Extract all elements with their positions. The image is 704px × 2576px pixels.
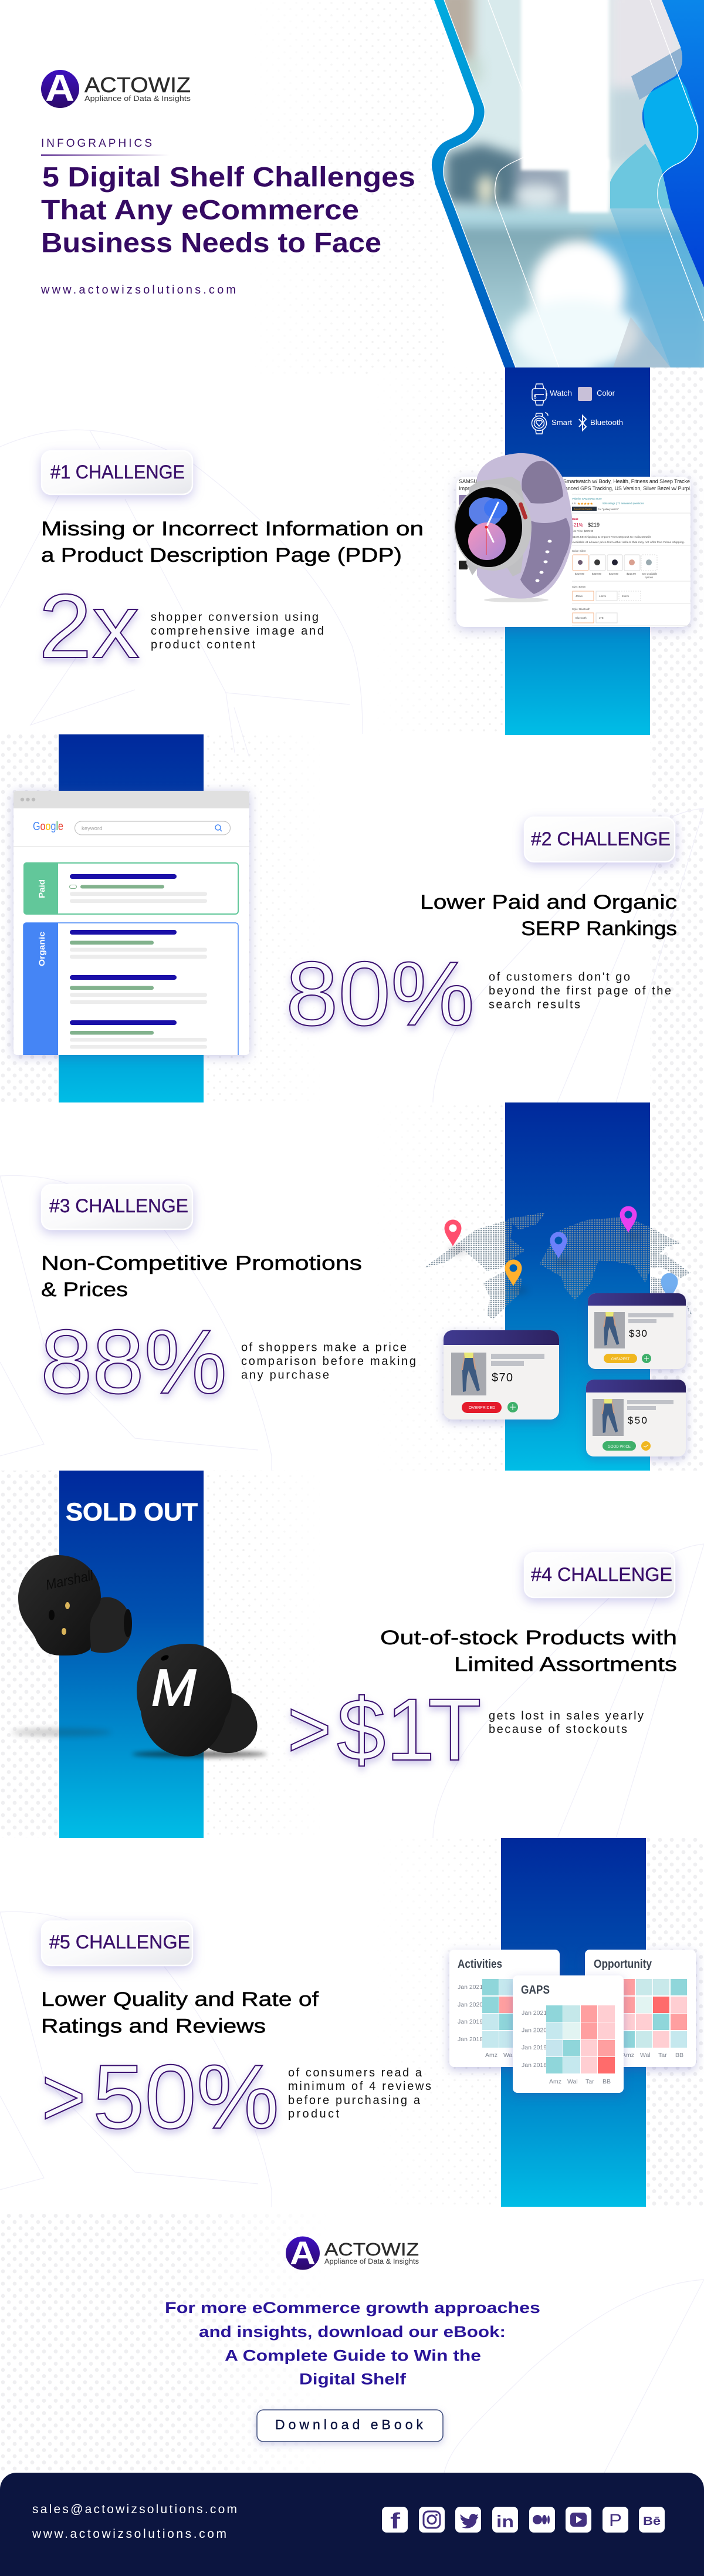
stat description: minimum of 4 reviews (288, 2080, 431, 2093)
feature icons: watch, color, smart, bluetooth: Watch (550, 389, 572, 397)
badge: #1 challenge: #1 CHALLENGE (50, 461, 185, 483)
feature icons: watch, color, smart, bluetooth (532, 384, 623, 434)
product page card: 526 ratings | 72 answered questions (603, 502, 644, 505)
gaps heat map card: Jan 2018 (522, 2062, 547, 2069)
badge: #2 challenge (524, 817, 675, 862)
download button: Download eBook (275, 2417, 424, 2432)
organic results: Organic (38, 931, 46, 966)
heading: Missing or Incorrect Information on (41, 518, 424, 540)
activities heat map card: Jan 2018 (458, 2036, 483, 2043)
badge: #4 challenge: #4 CHALLENGE (531, 1564, 672, 1585)
stat description: product content (151, 639, 255, 652)
heading: a Product Description Page (PDP) (41, 544, 402, 567)
opportunity heat map card: BB (675, 2052, 683, 2059)
product card: $70 overpriced: $70 (492, 1371, 513, 1384)
call to action text: For more eCommerce growth approaches (165, 2299, 540, 2317)
product page card: $219 (588, 522, 600, 528)
activities heat map card: Jan 2020 (458, 2001, 483, 2008)
social icons (382, 2507, 665, 2534)
call to action text: Digital Shelf (299, 2371, 407, 2388)
opportunity heat map card: Wal (640, 2052, 651, 2059)
product page card: Deal (572, 518, 578, 521)
eyebrow: infographics (41, 137, 170, 156)
stat: >50%: 50% (93, 2046, 279, 2147)
stat description (241, 1341, 416, 1382)
panel: challenge 4 (12, 1471, 677, 1838)
paid result (23, 862, 238, 915)
call to action text (165, 2299, 540, 2388)
product page card: Amazon's Choice (574, 507, 593, 511)
product page card: Available at a lower price from other sellers that may not offer free Prime shipping. (572, 541, 685, 544)
stat: 80%: 80% (286, 943, 475, 1044)
smartwatch (454, 453, 573, 602)
logo: Actowiz (41, 67, 191, 109)
product page card: for "galaxy watch" (598, 508, 619, 511)
activities heat map card: Jan 2021 (458, 1984, 483, 1991)
pin: yellow (505, 1260, 522, 1286)
badge: #5 challenge (42, 1921, 192, 1965)
download button (257, 2410, 443, 2442)
stat: 2x: 2x (39, 575, 140, 677)
stat description: product (288, 2108, 339, 2120)
product page card: Smartwatch w/ Body, Health, Fitness and Sleep Tracke (563, 478, 690, 484)
badge: #3 challenge: #3 CHALLENGE (49, 1195, 188, 1216)
gaps heat map card: Wal (567, 2078, 578, 2085)
panel: challenge 5 (41, 1838, 696, 2207)
stat description: of customers don't go (489, 971, 630, 984)
gaps heat map card: GAPS (521, 1984, 550, 1997)
gaps heat map card: Jan 2020 (522, 2027, 547, 2034)
stat: >$1T: $1T (337, 1680, 482, 1779)
product page card: Style: Bluetooth (572, 608, 590, 611)
logo: Actowiz closing: Appliance of Data & Insights (324, 2258, 419, 2265)
product card: $50 good price: GOOD PRICE (608, 1445, 631, 1449)
pin: red (445, 1220, 461, 1246)
social icons: f (390, 2509, 400, 2534)
logo: Actowiz closing (286, 2234, 419, 2271)
feature icons: watch, color, smart, bluetooth: 5 (534, 395, 537, 400)
stat description: search results (489, 998, 580, 1011)
website url: www.actowizsolutions.com (40, 284, 236, 296)
product page card: LTE (599, 616, 604, 619)
product page card: 44mm (599, 595, 607, 598)
product page card: Color: Silver (572, 549, 586, 552)
heading (420, 891, 677, 940)
stat description: of shoppers make a price (241, 1341, 407, 1354)
heading (41, 1988, 319, 2037)
feature icons: watch, color, smart, bluetooth: Color (597, 389, 615, 397)
title: That Any eCommerce (41, 194, 359, 225)
panel: challenge 3 (40, 1102, 698, 1471)
title: 5 Digital Shelf Challenges (42, 161, 415, 193)
gaps heat map card (513, 1975, 624, 2093)
product card: $30 cheapest: CHEAPEST (611, 1358, 629, 1361)
gaps heat map card: Jan 2021 (522, 2009, 547, 2017)
heading: Out-of-stock Products with (380, 1627, 677, 1649)
logo: Actowiz closing: A (290, 2234, 316, 2271)
activities heat map card: Activities (458, 1958, 502, 1971)
social icons: in (496, 2513, 514, 2531)
stat description: comprehensive image and (151, 625, 324, 638)
product card: $50 good price: $50 (628, 1415, 647, 1426)
stat description: of consumers read a (288, 2066, 422, 2079)
opportunity heat map card (585, 1950, 696, 2067)
stat: 88%: 88% (40, 1311, 227, 1412)
product page card: $219.99 (609, 572, 618, 575)
badge: #4 challenge (524, 1553, 675, 1597)
logo: Actowiz closing: ACTOWIZ (324, 2239, 419, 2260)
left earbud (18, 1555, 132, 1655)
product page card (456, 477, 691, 627)
badge: #5 challenge: #5 CHALLENGE (49, 1931, 190, 1953)
stat description: beyond the first page of the (489, 984, 671, 997)
logo: Actowiz: ACTOWIZ (84, 73, 191, 97)
product page card: $329.99 (592, 572, 601, 575)
product page card: $219.99 (627, 572, 636, 575)
product card: $50 good price (586, 1380, 686, 1456)
product card: $70 overpriced (444, 1330, 559, 1420)
panel: challenge 2 (13, 734, 677, 1102)
activities heat map card (449, 1950, 560, 2067)
right earbud: M (151, 1658, 197, 1717)
feature icons: watch, color, smart, bluetooth: Bluetooth (590, 418, 623, 427)
logo: Actowiz: A (45, 67, 75, 109)
product page card: $109.58 Shipping & Import Fees Deposit to India Details (572, 535, 652, 538)
title: Business Needs to Face (41, 227, 381, 258)
pin: light blue (661, 1273, 678, 1300)
search results browser mock: keyword (82, 825, 102, 832)
opportunity heat map card: Amz (622, 2052, 634, 2059)
pin: magenta (620, 1206, 637, 1233)
stat: >$1T: > (287, 1683, 331, 1775)
blue column (501, 1838, 646, 2207)
world map with pins (422, 1206, 698, 1324)
product page card: ★★★★★ (577, 502, 593, 506)
blue column (505, 367, 650, 735)
product page card: Bluetooth (576, 616, 587, 619)
product page card: anced GPS Tracking, US Version, Silver Bezel w/ Purpl (565, 485, 690, 491)
product card: $30 cheapest (588, 1293, 686, 1369)
search results browser mock (13, 791, 249, 1055)
product page card: options (645, 576, 654, 579)
heading: Ratings and Reviews (41, 2015, 266, 2037)
heading: Non-Competitive Promotions (41, 1252, 362, 1274)
heading: Limited Assortments (454, 1653, 677, 1675)
blue column (505, 1102, 650, 1471)
activities heat map card: Amz (485, 2052, 497, 2059)
contact website: www.actowizsolutions.com (32, 2527, 226, 2541)
stat description: because of stockouts (489, 1723, 627, 1736)
call to action text: and insights, download our eBook: (199, 2323, 506, 2341)
feature icons: watch, color, smart, bluetooth: Smart (551, 418, 572, 427)
blue column (59, 1471, 204, 1838)
header image: blurred photo in angled frame (432, 0, 704, 377)
search results browser mock: Google (33, 820, 63, 833)
badge: #3 challenge (42, 1185, 192, 1229)
organic results (23, 923, 238, 1055)
stat: >50%: > (42, 2051, 86, 2143)
stat description: comparison before making (241, 1355, 416, 1368)
heading: Lower Paid and Organic (420, 891, 677, 913)
product page card: Visit the SAMSUNG Store (572, 497, 602, 500)
product page card: $219.99 (575, 572, 584, 575)
blue column (59, 734, 204, 1102)
call to action text: A Complete Guide to Win the (225, 2347, 481, 2365)
product page card: See available (642, 572, 658, 575)
heading: SERP Rankings (521, 918, 677, 940)
product page card: 45mm (622, 595, 629, 598)
product page card: 4.6 (572, 502, 576, 505)
badge: #2 challenge: #2 CHALLENGE (531, 828, 671, 849)
badge: #1 challenge (42, 451, 192, 494)
paid result: Paid (38, 879, 46, 898)
pin: violet (550, 1232, 567, 1259)
stat description (489, 971, 671, 1011)
product page card: 40mm (576, 595, 583, 598)
stat description (288, 2066, 431, 2120)
product page card: List Price: $279.99 (572, 530, 594, 532)
product card: $70 overpriced: OVERPRICED (469, 1406, 495, 1410)
eyebrow: infographics: INFOGRAPHICS (41, 137, 152, 150)
gaps heat map card: Amz (549, 2078, 561, 2085)
product page card: Size: 40mm (572, 585, 586, 588)
contact email: sales@actowizsolutions.com (32, 2503, 237, 2516)
right earbud (137, 1644, 258, 1756)
social icons: P (609, 2511, 622, 2530)
social icons: Bē (643, 2515, 661, 2528)
product card: $30 cheapest: $30 (629, 1328, 647, 1339)
gaps heat map card: Tar (585, 2078, 594, 2085)
heading (41, 1252, 362, 1301)
stat description: shopper conversion using (151, 611, 319, 623)
heading: Lower Quality and Rate of (41, 1988, 319, 2011)
activities heat map card: Wal (503, 2052, 514, 2059)
footer (0, 2473, 704, 2576)
stat description: gets lost in sales yearly (489, 1710, 644, 1722)
heading (380, 1627, 677, 1675)
product page card: SAMSU (459, 478, 478, 484)
stat description (151, 611, 324, 652)
title (41, 161, 415, 258)
sold out label: SOLD OUT (66, 1498, 198, 1526)
stat description: any purchase (241, 1369, 329, 1382)
stat description: before purchasing a (288, 2094, 421, 2107)
opportunity heat map card: Opportunity (594, 1958, 652, 1971)
left earbud: Marshall (45, 1567, 95, 1593)
opportunity heat map card: Tar (658, 2052, 667, 2059)
heading (41, 518, 424, 567)
panel: challenge 1 (39, 367, 691, 735)
logo: Actowiz: Appliance of Data & Insights (84, 94, 191, 103)
earbuds (12, 1555, 267, 1758)
gaps heat map card: Jan 2019 (522, 2044, 547, 2051)
gaps heat map card: BB (603, 2078, 611, 2085)
product page card: Impr (459, 485, 469, 491)
stat description (489, 1710, 644, 1736)
activities heat map card: Jan 2019 (458, 2018, 483, 2025)
heading: & Prices (41, 1279, 128, 1301)
product page card: -21% (572, 522, 583, 528)
